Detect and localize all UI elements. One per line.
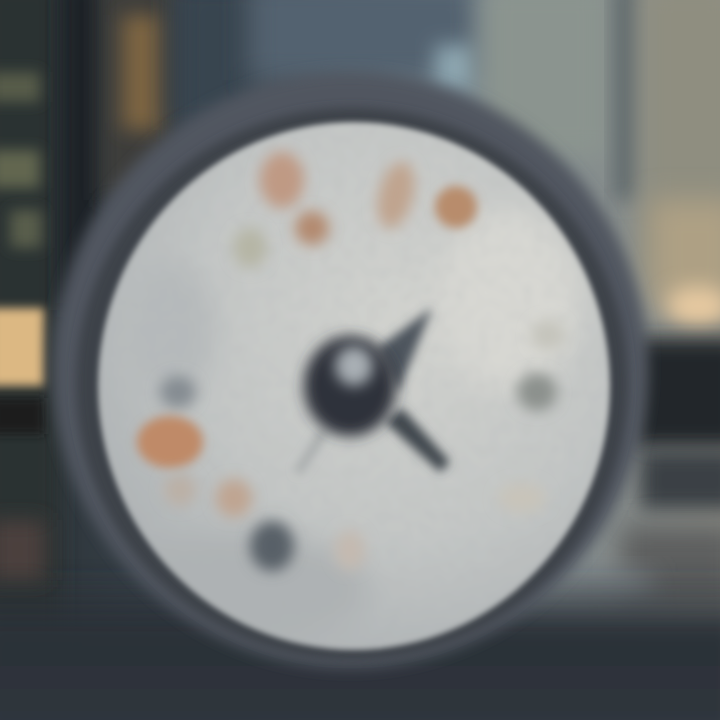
- clock face: [90, 115, 620, 655]
- clock rim: [52, 72, 648, 668]
- clock markers: [137, 152, 565, 571]
- clock hands and hub: [298, 308, 450, 472]
